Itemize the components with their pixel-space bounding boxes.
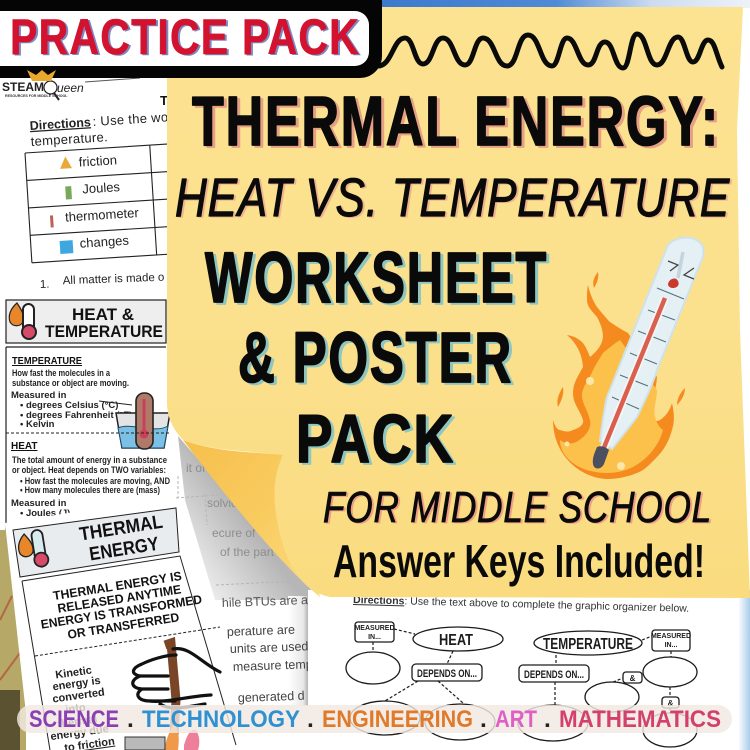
thermometer bulb cap bbox=[593, 446, 609, 468]
kinetic energy text: energy is bbox=[52, 675, 101, 693]
faded worksheet text: measure temp bbox=[233, 657, 313, 674]
word table bbox=[25, 144, 182, 263]
faded worksheet text bbox=[186, 461, 319, 705]
poster header: THERMAL bbox=[78, 512, 165, 546]
word table: Joules bbox=[82, 179, 121, 196]
temperature section: Measured in bbox=[11, 390, 67, 401]
icon: hands rubbing stick bbox=[133, 643, 220, 735]
footer band: STEAM subjects: SCIENCE bbox=[29, 706, 119, 733]
footer band: STEAM subjects: . bbox=[544, 706, 551, 733]
icon: battery bbox=[65, 186, 72, 200]
temperature section: • degrees Celsius (°C) bbox=[20, 400, 118, 411]
poster header: TEMPERATURE bbox=[45, 322, 163, 341]
word table: friction bbox=[78, 152, 117, 170]
temperature section: substance or object are moving. bbox=[12, 378, 129, 389]
temperature section: • Kelvin bbox=[20, 419, 55, 430]
depends-on box: DEPENDS ON... bbox=[417, 668, 477, 680]
first question: All matter is made o bbox=[63, 272, 165, 287]
squiggle line bbox=[378, 34, 722, 68]
faded worksheet text: perature are bbox=[227, 623, 295, 639]
icon: thermometer with flame bbox=[16, 529, 49, 570]
logo: STEAM Queen: RESOURCES FOR MIDDLE SCHOOL bbox=[5, 94, 68, 98]
footer band: STEAM subjects: TECHNOLOGY bbox=[142, 706, 300, 733]
measured-in box: MEASURED bbox=[354, 625, 395, 632]
heat oval: HEAT bbox=[439, 632, 473, 649]
poster header bbox=[13, 508, 179, 577]
panel: yellow sticky note bbox=[167, 7, 750, 598]
poster header: HEAT & bbox=[72, 305, 134, 324]
faded worksheet text: hile BTUs are a u bbox=[222, 593, 319, 610]
ampersand box: & bbox=[630, 674, 636, 683]
footer band: STEAM subjects: ENGINEERING bbox=[322, 706, 473, 733]
definition text: OR TRANSFERRED bbox=[66, 610, 180, 642]
first question bbox=[40, 272, 165, 291]
kinetic energy text: into bbox=[65, 702, 87, 716]
heat section: Measured in bbox=[11, 498, 67, 509]
heat oval bbox=[413, 627, 503, 651]
footer band: STEAM subjects bbox=[17, 705, 732, 733]
temperature section bbox=[11, 356, 132, 430]
directions text: temperature. bbox=[30, 129, 108, 149]
kinetic energy text: converted bbox=[52, 686, 105, 706]
kinetic energy text: energy due bbox=[50, 723, 109, 743]
kinetic energy text bbox=[50, 665, 116, 750]
ampersand box bbox=[662, 697, 679, 708]
logo: STEAM Queen: ueen bbox=[57, 81, 84, 95]
faded worksheet text: ecure of bbox=[212, 526, 256, 540]
heat section: or object. Heat depends on TWO variables: bbox=[12, 465, 166, 476]
depends-on box: DEPENDS ON... bbox=[524, 669, 584, 681]
measured-in box: IN... bbox=[368, 634, 381, 641]
directions text: Directions bbox=[29, 115, 91, 133]
panel: top-left worksheet bbox=[0, 75, 190, 296]
icon: thermometer with flame bbox=[9, 303, 36, 339]
panel: heat and temperature poster bbox=[0, 295, 172, 530]
heading: Worksheet & Poster Pack bbox=[205, 239, 548, 477]
poster header: ENERGY bbox=[88, 534, 161, 565]
faded worksheet text: solvide bbox=[207, 496, 245, 510]
panel: gray worksheet under the curl bbox=[165, 430, 320, 750]
faded worksheet text: generated d bbox=[238, 689, 305, 705]
logo crown bbox=[27, 70, 56, 81]
olive background edge bbox=[0, 528, 26, 750]
footer band: STEAM subjects: . bbox=[127, 706, 134, 733]
faded worksheet text: units are used bbox=[230, 639, 309, 656]
faded worksheet text: of the part bbox=[220, 545, 275, 559]
heading: Worksheet & Poster Pack: WORKSHEET bbox=[205, 239, 548, 318]
directions text: Directions: Use the text above to complete the graphic organizer below. bbox=[353, 594, 689, 615]
icon: thermometer in water bbox=[99, 393, 170, 449]
logo: STEAM Queen bbox=[2, 80, 84, 100]
thermometer tube bbox=[603, 298, 665, 450]
temperature oval: TEMPERATURE bbox=[543, 636, 633, 653]
top blue strip bbox=[360, 0, 750, 8]
heat organizer bbox=[346, 622, 503, 740]
badge: practice pack bbox=[0, 0, 382, 78]
temperature oval bbox=[534, 631, 642, 655]
heat section bbox=[11, 441, 170, 519]
logo: STEAM Queen: STEAM bbox=[2, 80, 44, 94]
ampersand box: & bbox=[668, 699, 674, 708]
word table: thermometer bbox=[65, 205, 140, 225]
temperature section: How fast the molecules in a bbox=[12, 368, 111, 379]
depends-on box bbox=[412, 664, 482, 681]
thermometer body bbox=[600, 237, 703, 449]
heading: Worksheet & Poster Pack: PACK bbox=[296, 401, 455, 477]
heading: Worksheet & Poster Pack: & POSTER bbox=[238, 319, 513, 398]
icon: fire and block bbox=[125, 722, 199, 750]
temperature organizer bbox=[518, 630, 697, 747]
directions text bbox=[29, 109, 182, 149]
thermometer face bbox=[668, 252, 694, 288]
measured-in box: MEASURED bbox=[651, 633, 691, 640]
definition text: THERMAL ENERGY IS bbox=[52, 569, 183, 603]
depends-on box bbox=[519, 665, 589, 682]
panel: bottom-right worksheet with graphic organizer bbox=[308, 590, 750, 750]
icon: thermometer bbox=[50, 215, 54, 228]
ampersand box bbox=[623, 672, 642, 683]
heat section: The total amount of energy in a substance bbox=[12, 455, 167, 466]
kinetic energy text: thermal bbox=[57, 713, 98, 731]
icon: thermometer in flames bbox=[553, 237, 703, 479]
definition text: ENERGY IS TRANSFORMED bbox=[40, 592, 203, 632]
measured-in box: IN... bbox=[665, 642, 677, 649]
footer band: STEAM subjects: ART bbox=[495, 706, 537, 733]
faded worksheet text: it of bbox=[186, 461, 206, 475]
thermometer scale bbox=[612, 288, 684, 409]
definition text bbox=[22, 556, 236, 750]
word table: changes bbox=[79, 233, 130, 251]
temperature section: TEMPERATURE bbox=[12, 356, 82, 367]
worksheet heading: T bbox=[160, 93, 168, 108]
directions text: : Use the word bbox=[92, 109, 181, 129]
footer band: STEAM subjects: MATHEMATICS bbox=[559, 706, 721, 733]
heat section: • How many molecules there are (mass) bbox=[20, 485, 160, 496]
measured-in box bbox=[354, 622, 395, 642]
temperature section: • degrees Fahrenheit (°F) bbox=[20, 410, 132, 421]
panel: thermal energy poster bbox=[5, 496, 245, 750]
icon: friction bbox=[59, 156, 72, 169]
footer band: STEAM subjects: . bbox=[307, 706, 314, 733]
page curl bbox=[183, 440, 320, 597]
definition text: RELEASED ANYTIME bbox=[57, 582, 182, 616]
heat section: HEAT bbox=[11, 441, 37, 452]
flame bbox=[553, 272, 685, 479]
first question: 1. bbox=[40, 279, 50, 291]
footer band: STEAM subjects: . bbox=[480, 706, 487, 733]
measured-in box bbox=[651, 630, 691, 651]
kinetic energy text: Kinetic bbox=[55, 665, 93, 682]
heat section: • Joules (J) bbox=[20, 508, 70, 519]
heat section: • How fast the molecules are moving, AND bbox=[20, 476, 170, 487]
icon: arrow bbox=[60, 240, 73, 254]
poster header bbox=[6, 300, 166, 343]
badge: practice pack: PRACTICE PACK bbox=[10, 9, 360, 65]
